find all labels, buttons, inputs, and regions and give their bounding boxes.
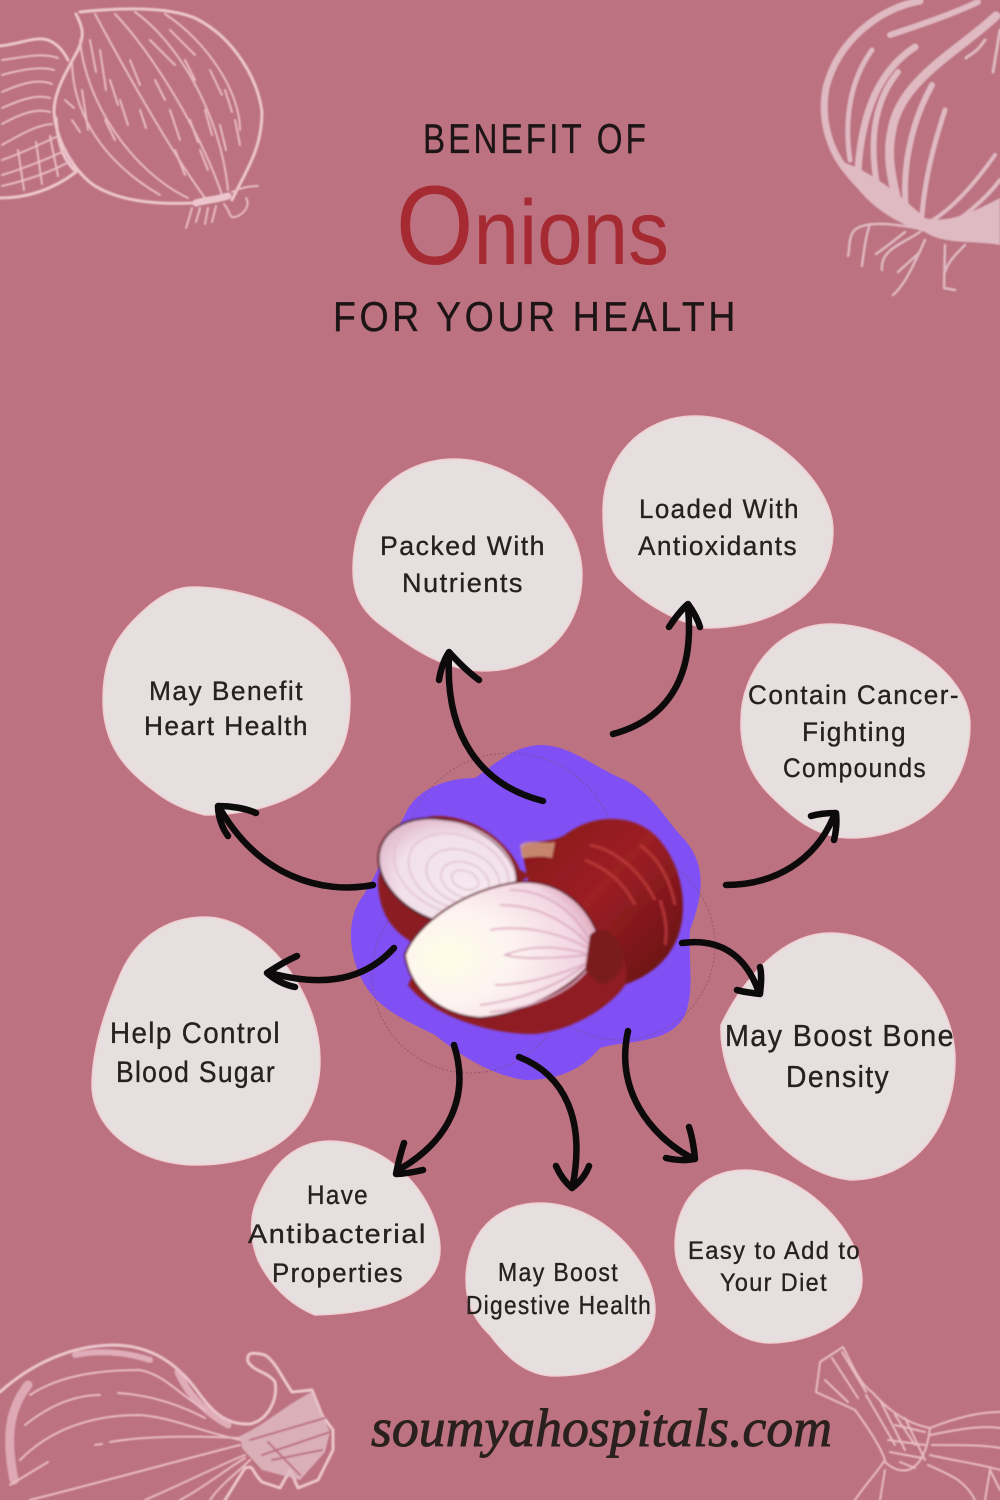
bubble: have antibacterial properties: Properties: [272, 1258, 404, 1288]
bubble: help control blood sugar: Blood Sugar: [116, 1056, 276, 1089]
bubble: help control blood sugar: Help Control: [110, 1017, 281, 1050]
bubble: may boost bone density: [721, 933, 955, 1180]
heading: onions: Onions: [396, 163, 669, 288]
illustration: onion sketch bottom right: [816, 1347, 1000, 1500]
title: [333, 115, 739, 340]
bubble: contain cancer-fighting compounds: Contain Cancer-: [748, 680, 960, 710]
heading: for your health: FOR YOUR HEALTH: [333, 293, 739, 340]
bubble: may boost bone density: May Boost Bone: [725, 1018, 955, 1053]
dotted circles: [372, 753, 715, 1073]
bubble: packed with nutrients: Packed With: [380, 531, 546, 561]
arrow: to antibacterial: [396, 1045, 459, 1174]
bubble: easy to add to your diet: [675, 1170, 862, 1343]
bubble: packed with nutrients: [353, 459, 582, 671]
bubble: contain cancer-fighting compounds: [741, 624, 970, 838]
bubble: contain cancer-fighting compounds: Fighting: [802, 717, 907, 747]
bubble: have antibacterial properties: [248, 1141, 440, 1315]
arrow: to blood sugar: [267, 948, 394, 987]
bubble: contain cancer-fighting compounds: Compounds: [783, 753, 927, 783]
bubble: easy to add to your diet: Easy to Add to: [688, 1237, 861, 1265]
bubble: have antibacterial properties: Have: [307, 1180, 369, 1210]
arrow: to easy to add: [625, 1031, 695, 1160]
heading: benefit of: BENEFIT OF: [423, 115, 649, 162]
bubble: may benefit heart health: May Benefit: [149, 676, 304, 706]
bubble: loaded with antioxidants: Antioxidants: [638, 531, 798, 561]
bubble: may boost digestive health: May Boost: [498, 1257, 619, 1287]
illustration: onion sketch top left: [0, 9, 262, 228]
bubble: packed with nutrients: Nutrients: [402, 568, 524, 598]
arrow: to nutrients: [439, 652, 543, 801]
purple blob behind onions: [351, 745, 701, 1080]
website footer: soumyahospitals.com: [371, 1398, 832, 1458]
bubble: may boost bone density: Density: [786, 1059, 890, 1094]
arrow: to antioxidants: [613, 604, 700, 734]
bubble: may boost digestive health: Digestive Health: [466, 1290, 652, 1320]
bubble: easy to add to your diet: Your Diet: [720, 1269, 828, 1297]
illustration: onion roots top right: [824, 1, 1000, 295]
front half onion: [405, 882, 626, 1034]
illustration: onion sketch bottom left: [0, 1345, 333, 1500]
arrow: to digestive health: [519, 1057, 589, 1188]
bubble: may boost digestive health: [466, 1203, 655, 1376]
bubble: have antibacterial properties: Antibacterial: [248, 1219, 427, 1249]
bubble: help control blood sugar: [92, 917, 320, 1165]
arrow: to cancer-fighting compounds: [726, 813, 836, 885]
arrow: to bone density: [682, 942, 761, 994]
bubble: may benefit heart health: [103, 587, 350, 815]
bubble: loaded with antioxidants: Loaded With: [639, 494, 800, 524]
arrow: to heart health: [218, 806, 373, 887]
bubble: may benefit heart health: Heart Health: [144, 711, 309, 741]
left half onion: [363, 799, 533, 950]
central onions illustration: [363, 799, 683, 1034]
arrows: [218, 604, 836, 1188]
whole red onion: [520, 819, 683, 990]
bubble: loaded with antioxidants: [603, 416, 833, 628]
